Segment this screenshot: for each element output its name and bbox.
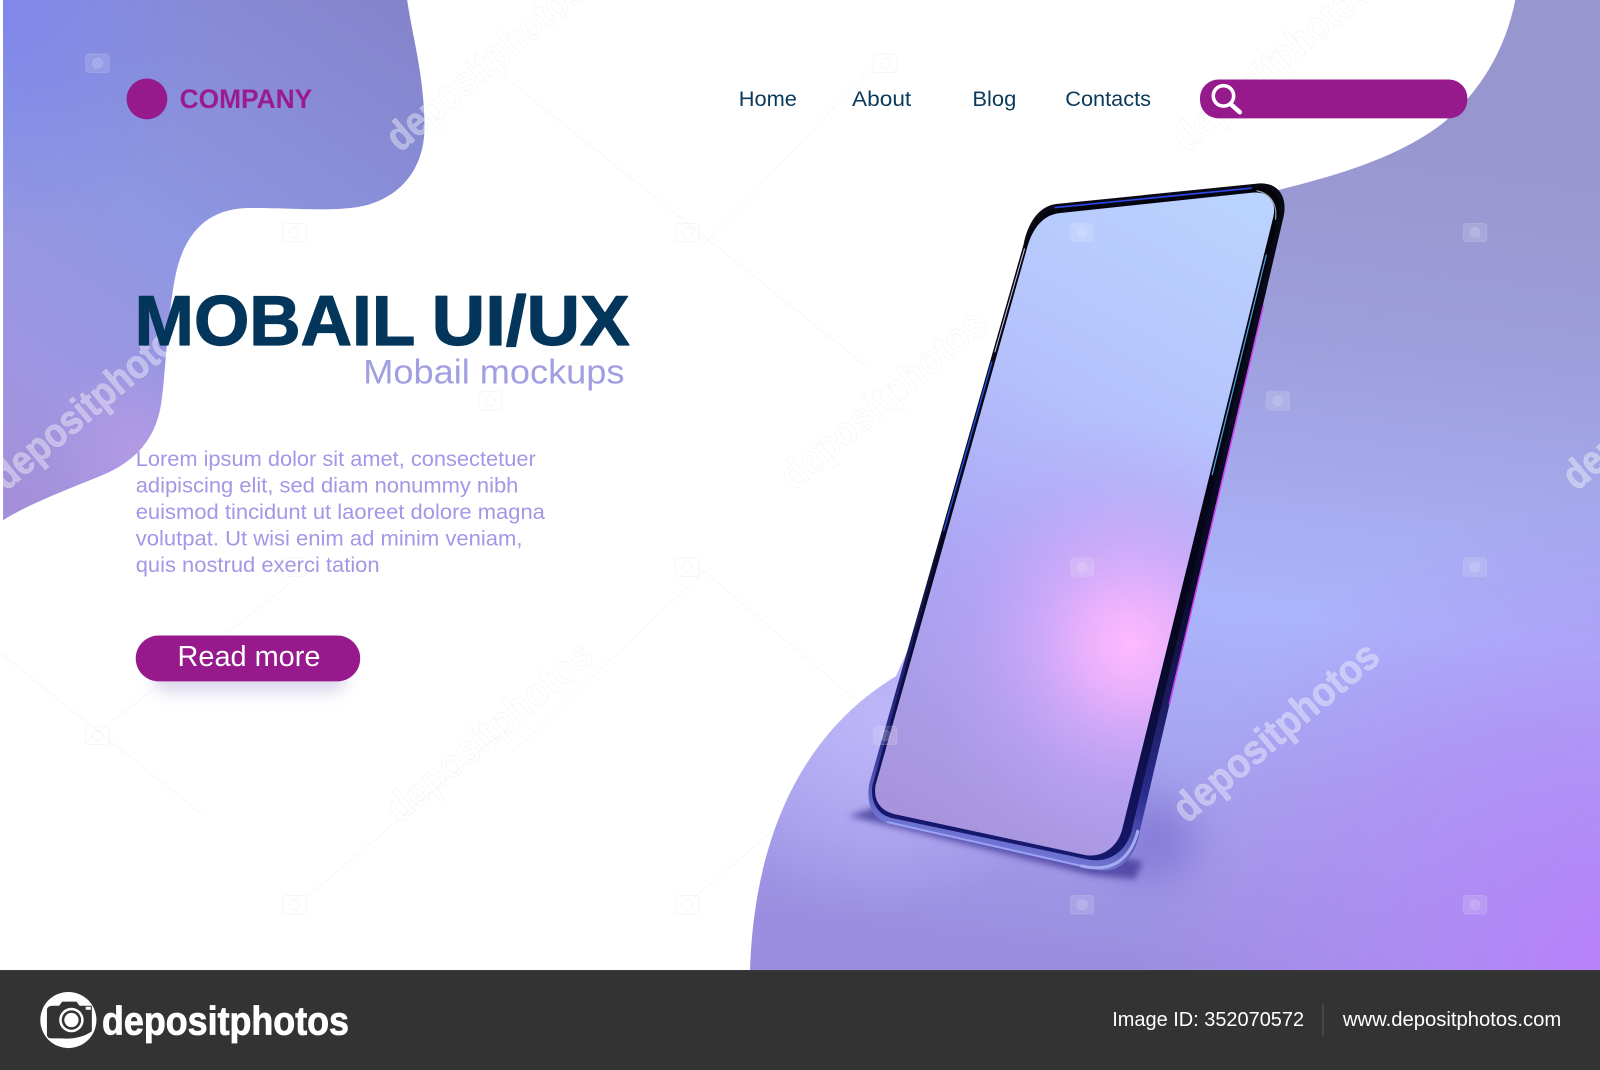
search bar [1200, 80, 1467, 118]
footer bar [0, 970, 1600, 1070]
website: www.depositphotos.com [1342, 1009, 1561, 1031]
phone body [868, 183, 1285, 871]
phone shadow [849, 785, 1195, 879]
icon: magnifier [1213, 86, 1240, 112]
read more button [136, 635, 360, 692]
subtitle: Mobail mockups [363, 354, 624, 392]
title: UI/UX [432, 281, 630, 360]
screen glow [875, 193, 1274, 856]
icon: camera logo [40, 992, 96, 1048]
body text: Lorem ipsum dolor sit amet, consectetuer [136, 448, 536, 471]
phone inner bezel [872, 187, 1280, 860]
title [135, 281, 630, 360]
watermarks: depositphotos [1163, 632, 1388, 831]
top-left gradient blob [3, 0, 424, 520]
phone mockup [849, 183, 1285, 879]
logo mark [127, 79, 167, 119]
watermarks: depositphotos [770, 299, 995, 499]
watermarks: depositphotos [376, 632, 601, 831]
phone edge highlights [888, 188, 1276, 868]
navigation [739, 87, 1151, 111]
logo name: COMPANY [180, 84, 313, 114]
navigation: Blog [972, 87, 1016, 111]
body text: quis nostrud exerci tation [136, 554, 380, 577]
right gradient blob [750, 0, 1600, 970]
navigation: Contacts [1065, 87, 1151, 111]
body text: euismod tincidunt ut laoreet dolore magna [136, 501, 545, 524]
footer brand name: depositphotos [102, 999, 349, 1043]
title: MOBAIL [135, 281, 415, 360]
body text: volutpat. Ut wisi enim ad minim veniam, [136, 528, 522, 551]
phone screen [875, 193, 1274, 856]
image id: Image ID: 352070572 [1112, 1009, 1304, 1031]
navigation: Home [739, 87, 797, 111]
logo: company [127, 79, 313, 119]
body text: adipiscing elit, sed diam nonummy nibh [136, 475, 518, 498]
read more button: Read more [178, 641, 320, 673]
navigation: About [852, 87, 911, 111]
body text [136, 448, 545, 577]
